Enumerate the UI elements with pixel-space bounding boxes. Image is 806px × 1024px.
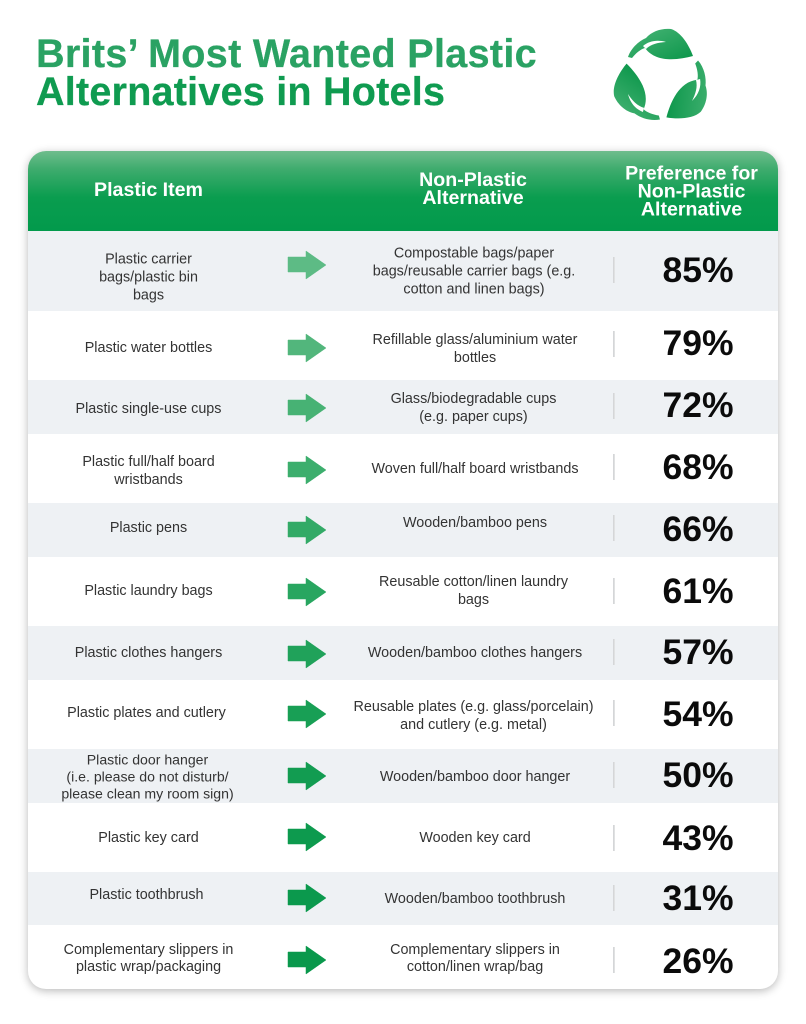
- alternative text: Wooden/bamboo pens: [403, 515, 547, 531]
- divider: [612, 762, 614, 788]
- item text: Plastic key card: [98, 830, 199, 846]
- divider: [612, 700, 614, 726]
- arrow: [288, 640, 326, 668]
- alternative text: Woven full/half board wristbands: [371, 461, 579, 477]
- alternative text: Reusable cotton/linen laundry: [379, 574, 568, 590]
- title: [36, 32, 537, 114]
- item text: bags: [133, 287, 164, 303]
- alternative text: Wooden key card: [419, 830, 531, 846]
- alternative text: Wooden/bamboo door hanger: [380, 769, 570, 785]
- item text: Complementary slippers in: [64, 942, 233, 958]
- alternative text: Compostable bags/paper: [394, 245, 554, 261]
- alternative text: cotton and linen bags): [403, 281, 545, 297]
- item text: Plastic full/half board: [82, 454, 215, 470]
- percentage: 26%: [662, 941, 734, 981]
- divider: [612, 825, 614, 851]
- item text: (i.e. please do not disturb/: [66, 768, 229, 784]
- percentage: 57%: [662, 632, 734, 672]
- title: Alternatives in Hotels: [36, 70, 445, 114]
- arrow: [288, 700, 326, 728]
- percentage: 79%: [662, 323, 734, 363]
- item text: Plastic door hanger: [87, 751, 208, 767]
- icon: recycling leaves: [614, 28, 707, 120]
- percentage: 31%: [662, 878, 734, 918]
- item text: please clean my room sign): [61, 785, 234, 801]
- table panel: [28, 151, 778, 989]
- alternative text: Wooden/bamboo clothes hangers: [368, 645, 582, 661]
- heading: non-plastic alternative: Non-Plastic: [419, 169, 527, 191]
- item text: [64, 942, 233, 976]
- arrow: [288, 334, 326, 362]
- heading: preference: [625, 163, 758, 221]
- divider: [612, 257, 614, 283]
- heading: preference: Alternative: [641, 199, 742, 221]
- item text: plastic wrap/packaging: [76, 960, 221, 976]
- alternative text: Wooden/bamboo toothbrush: [385, 891, 565, 907]
- arrow: [288, 250, 326, 280]
- divider: [612, 639, 614, 665]
- item text: Plastic laundry bags: [84, 583, 213, 599]
- row: plates and cutlery: [67, 694, 734, 734]
- item text: Plastic pens: [110, 520, 187, 536]
- alternative text: Reusable plates (e.g. glass/porcelain): [354, 699, 594, 715]
- item text: Plastic water bottles: [85, 340, 212, 356]
- item text: [99, 251, 198, 303]
- alternative text: [379, 574, 568, 608]
- alternative text: Complementary slippers in: [390, 942, 560, 958]
- alternative text: [390, 942, 560, 976]
- title: Brits’ Most Wanted Plastic: [36, 32, 537, 76]
- row: toothbrush: [28, 872, 778, 925]
- arrow: [288, 516, 326, 544]
- arrow: [288, 884, 326, 912]
- percentage: 68%: [662, 447, 734, 487]
- percentage: 50%: [662, 755, 734, 795]
- arrow: [288, 762, 326, 790]
- arrow: [288, 946, 326, 974]
- item text: Plastic single-use cups: [76, 401, 221, 417]
- percentage: 61%: [662, 571, 734, 611]
- item text: Plastic toothbrush: [89, 887, 204, 903]
- alternative text: (e.g. paper cups): [419, 409, 528, 425]
- row: cups: [28, 380, 778, 434]
- row: pens: [28, 503, 778, 557]
- alternative text: bottles: [454, 350, 496, 366]
- item text: Plastic clothes hangers: [75, 645, 222, 661]
- alternative text: and cutlery (e.g. metal): [400, 717, 547, 733]
- heading: non-plastic alternative: Alternative: [422, 187, 524, 209]
- divider: [612, 578, 614, 604]
- alternative text: Refillable glass/aluminium water: [373, 332, 577, 348]
- row: carrier bags: [28, 231, 778, 311]
- heading: plastic item: Plastic Item: [94, 178, 203, 200]
- percentage: 54%: [662, 694, 734, 734]
- row: clothes hangers: [28, 626, 778, 680]
- divider: [612, 885, 614, 911]
- arrow: [288, 394, 326, 422]
- item text: bags/plastic bin: [99, 269, 198, 285]
- row: laundry bags: [84, 571, 734, 611]
- percentage: 43%: [662, 818, 734, 858]
- item text: Plastic plates and cutlery: [67, 705, 226, 721]
- item text: [82, 454, 215, 488]
- divider: [612, 515, 614, 541]
- item text: [61, 751, 234, 802]
- item text: wristbands: [114, 472, 183, 488]
- percentage: 72%: [662, 385, 734, 425]
- table header: [28, 151, 778, 232]
- alternative text: [354, 699, 594, 733]
- row: wristbands: [82, 447, 734, 488]
- divider: [612, 947, 614, 973]
- divider: [612, 331, 614, 357]
- arrow: [288, 578, 326, 606]
- arrow: [288, 822, 326, 852]
- alternative text: bags/reusable carrier bags (e.g.: [373, 263, 575, 279]
- heading: non-plastic alternative: [419, 169, 527, 209]
- percentage: 66%: [662, 509, 734, 549]
- divider: [612, 393, 614, 419]
- alternative text: Glass/biodegradable cups: [391, 391, 556, 407]
- alternative text: bags: [458, 592, 489, 608]
- heading: preference: Preference for: [625, 163, 758, 185]
- alternative text: cotton/linen wrap/bag: [407, 960, 543, 976]
- arrow: [288, 456, 326, 484]
- item text: Plastic carrier: [105, 251, 192, 267]
- alternative text: [373, 332, 578, 366]
- row: water bottles: [85, 323, 734, 366]
- alternative text: [391, 391, 556, 425]
- heading: preference: Non-Plastic: [638, 181, 745, 203]
- row: door hanger: [28, 749, 778, 803]
- row: slippers: [64, 941, 734, 981]
- divider: [612, 454, 614, 480]
- percentage: 85%: [662, 250, 734, 290]
- row: key card: [98, 818, 734, 858]
- alternative text: [373, 245, 575, 297]
